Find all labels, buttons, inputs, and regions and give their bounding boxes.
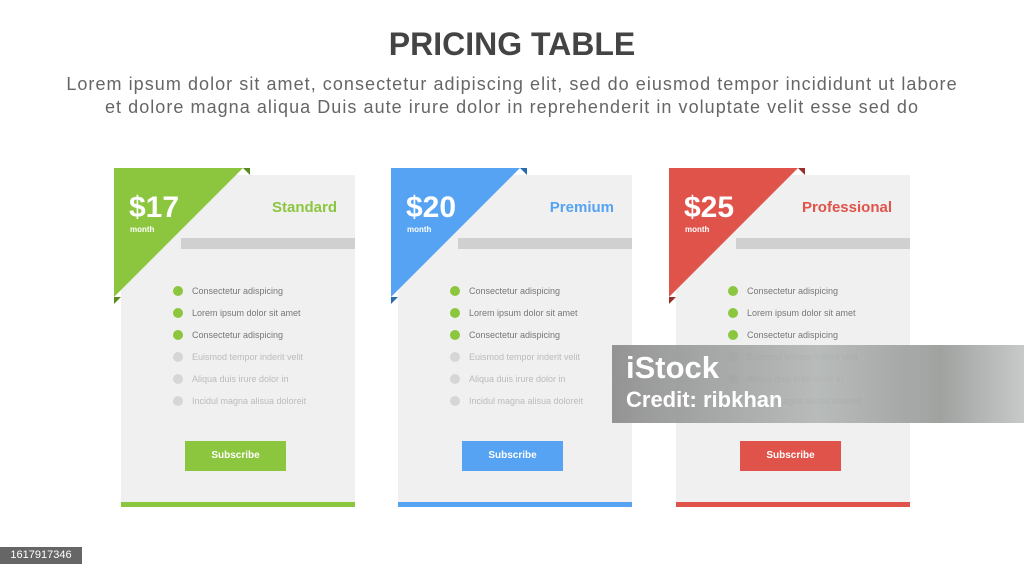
button [185,441,286,471]
features list: Euismod tempor inderit velit [747,352,858,362]
features list: Consectetur adispicing [192,286,283,296]
ribbon: price [669,168,805,304]
button [740,441,841,471]
plan name: Standard [272,199,337,216]
panel: premium: month [407,225,431,234]
subtitle: Lorem ipsum dolor sit amet, consectetur adipiscing elit, sed do eiusmod tempor incididunt ut labore [66,74,958,94]
plan name: Professional [802,199,892,216]
image id label [0,547,82,564]
button: Subscribe [488,450,537,461]
image id label: 1617917346 [10,549,72,561]
watermark [612,345,1024,423]
features list: Euismod tempor inderit velit [469,352,580,362]
panel: premium [398,175,632,507]
panel: professional: $25 [684,191,734,224]
panel: professional [676,175,910,507]
features list: Aliqua duis irure dolor in [469,374,566,384]
plan name: Premium [550,199,614,216]
button: Subscribe [766,450,815,461]
panel: standard: month [130,225,154,234]
features list: Euismod tempor inderit velit [192,352,303,362]
features list: Lorem ipsum dolor sit amet [469,308,578,318]
features list: Incidul magna alisua doloreit [747,396,861,406]
ribbon: price [114,168,250,304]
button [462,441,563,471]
button: Subscribe [211,450,260,461]
features list: Consectetur adispicing [192,330,283,340]
features list: Lorem ipsum dolor sit amet [192,308,301,318]
panel: premium: $20 [406,191,456,224]
features list: Consectetur adispicing [747,330,838,340]
subtitle: et dolore magna aliqua Duis aute irure dolor in reprehenderit in voluptate velit esse sed do [105,97,919,117]
features list: Aliqua duis irure dolor in [747,374,844,384]
title: PRICING TABLE [389,26,635,62]
features list: Aliqua duis irure dolor in [192,374,289,384]
panel: professional: month [685,225,709,234]
watermark: iStock [626,350,719,385]
features list: Consectetur adispicing [469,330,560,340]
panel: standard: $17 [129,191,179,224]
features list [728,286,861,406]
grey header bar [181,238,355,249]
features list: Incidul magna alisua doloreit [469,396,583,406]
features list: Lorem ipsum dolor sit amet [747,308,856,318]
panel: standard [121,175,355,507]
subtitle [66,74,958,117]
ribbon: price [391,168,527,304]
features list [450,286,583,406]
features list [173,286,306,406]
watermark: Credit: ribkhan [626,387,782,412]
features list: Incidul magna alisua doloreit [192,396,306,406]
features list: Consectetur adispicing [469,286,560,296]
features list: Consectetur adispicing [747,286,838,296]
